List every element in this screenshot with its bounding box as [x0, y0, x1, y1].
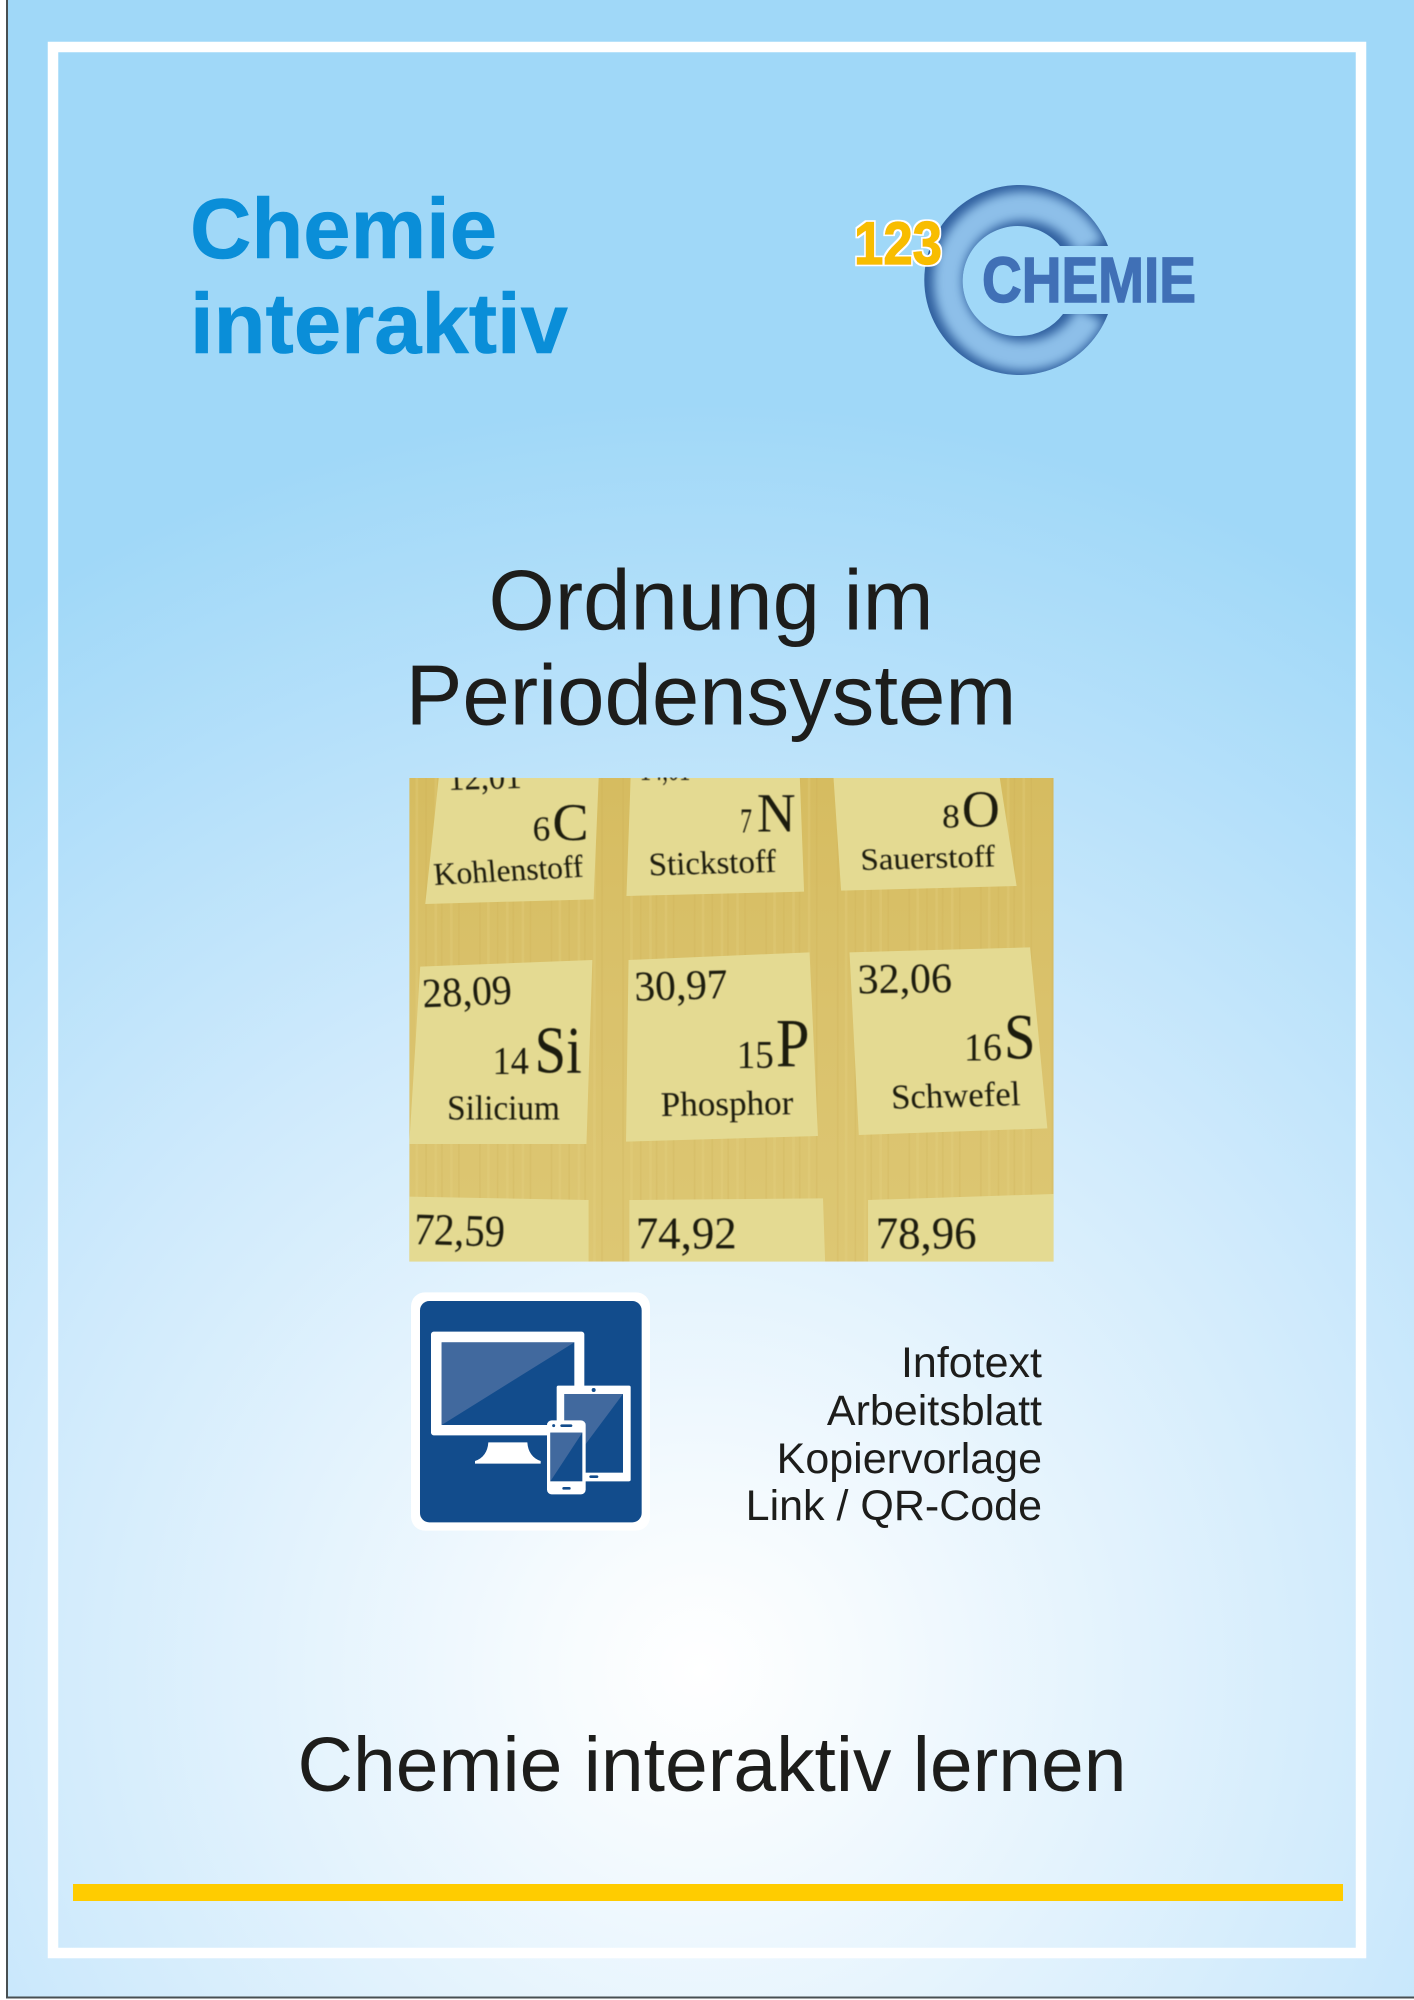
- photo: element cards on wood table: 12,01: [447, 756, 522, 798]
- heading: Chemie interaktiv: [190, 182, 568, 372]
- photo: element cards on wood table: Silicium: [447, 1089, 560, 1127]
- text block: contents list: Kopiervorlage: [777, 1435, 1042, 1483]
- photo: element cards on wood table: 32,06: [857, 955, 952, 1003]
- photo: element cards on wood table: Kohlenstoff: [432, 849, 585, 892]
- logo: 123 Chemie: 123: [854, 210, 942, 277]
- photo: element cards on wood table: 28,09: [421, 968, 513, 1017]
- photo: element cards on wood table: 6: [533, 809, 550, 849]
- photo: element cards on wood table: O: [962, 781, 1000, 838]
- logo: 123 Chemie: CHEMIE: [982, 244, 1196, 316]
- photo: element cards on wood table: 30,97: [633, 961, 729, 1010]
- photo: element cards on wood table: Si: [535, 1014, 582, 1088]
- photo: element cards on wood table: 7: [740, 801, 752, 841]
- photo: element cards on wood table: 78,96: [876, 1209, 977, 1259]
- icon: desktop, tablet and phone: [411, 1292, 650, 1531]
- photo: element cards on wood table: S: [1004, 1001, 1036, 1073]
- text block: contents list: Link / QR-Code: [746, 1482, 1042, 1530]
- photo: element cards on wood table: Stickstoff: [648, 844, 778, 883]
- photo: element cards on wood table: 14,01: [640, 751, 690, 788]
- photo: element cards on wood table: 74,92: [636, 1209, 737, 1259]
- photo: element cards on wood table: 72,59: [413, 1205, 506, 1257]
- text block: contents list: Arbeitsblatt: [827, 1387, 1042, 1435]
- heading: Chemie interaktiv: Chemie: [190, 182, 497, 277]
- photo: element cards on wood table: 14: [493, 1038, 529, 1082]
- photo: element cards on wood table: [409, 751, 1054, 1262]
- photo: element cards on wood table: P: [776, 1005, 810, 1081]
- photo: element cards on wood table: C: [552, 793, 589, 852]
- photo: element cards on wood table: Sauerstoff: [860, 839, 996, 877]
- title: Ordnung im Periodensystem: Ordnung im: [488, 554, 934, 648]
- photo: element cards on wood table: Phosphor: [660, 1083, 794, 1124]
- title: Ordnung im Periodensystem: Periodensystem: [406, 648, 1016, 744]
- photo: element cards on wood table: N: [757, 782, 796, 844]
- text block: contents list: [746, 1339, 1042, 1530]
- title: Ordnung im Periodensystem: [406, 554, 1016, 744]
- text block: contents list: Infotext: [901, 1339, 1042, 1387]
- logo: 123 Chemie: [854, 185, 1196, 375]
- heading: Chemie interaktiv: interaktiv: [190, 277, 568, 372]
- tagline: Chemie interaktiv lernen: Chemie interaktiv lernen: [297, 1722, 1127, 1808]
- photo: element cards on wood table: 15: [737, 1032, 774, 1076]
- photo: element cards on wood table: 8: [942, 798, 960, 835]
- photo: element cards on wood table: 16: [964, 1025, 1002, 1069]
- yellow bar: [73, 1884, 1343, 1901]
- photo: element cards on wood table: Schwefel: [890, 1074, 1021, 1117]
